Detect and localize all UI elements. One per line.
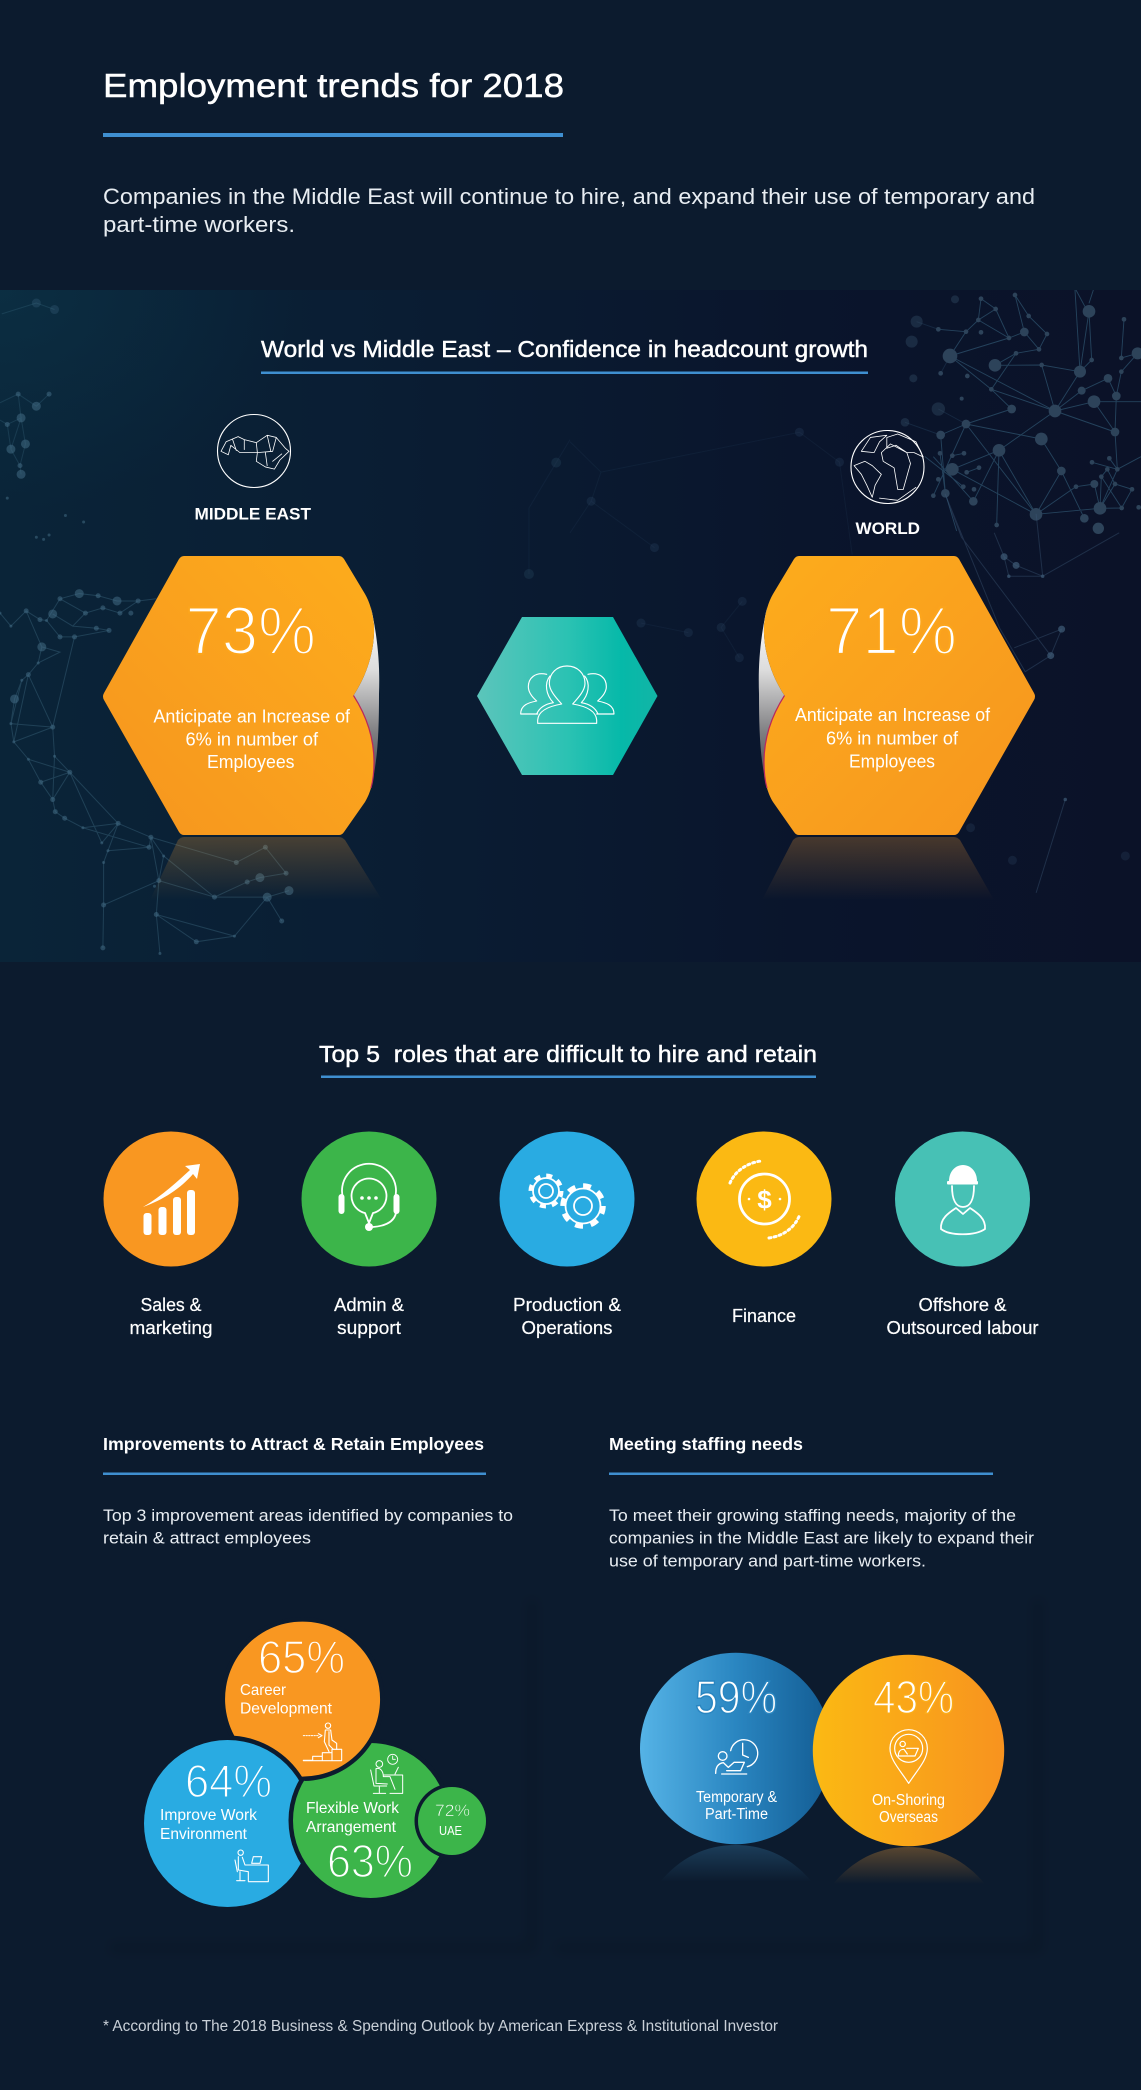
role: offshore and outsourced labour: Offshore & bbox=[918, 1295, 1006, 1315]
chart: improvement area bubbles bbox=[144, 1617, 490, 1907]
text block: meeting staffing needs: use of temporary and part-time workers. bbox=[609, 1552, 926, 1570]
chart: staffing need bubbles bbox=[640, 1653, 1004, 1884]
icon: central teal hexagon with people bbox=[477, 617, 658, 775]
reflection bbox=[762, 837, 994, 900]
role: admin and support: support bbox=[337, 1318, 401, 1338]
intro paragraph: Companies in the Middle East will continue to hire, and expand their use of temporary and bbox=[103, 184, 1035, 209]
bubble: improve work environment 64%: Environment bbox=[160, 1826, 248, 1843]
description: Anticipate an Increase of bbox=[795, 704, 991, 725]
bubble: on-shoring overseas 43%: 43% bbox=[873, 1671, 954, 1723]
title: Employment trends for 2018 bbox=[103, 67, 564, 104]
bubble: improve work environment 64%: Improve Work bbox=[160, 1807, 258, 1824]
upper right network map bbox=[901, 290, 1141, 534]
bubble: career development 65% bbox=[220, 1617, 384, 1781]
orange hexagon bbox=[103, 556, 374, 835]
faint centre nodes bbox=[529, 440, 570, 574]
icon: person with clock bbox=[716, 1740, 758, 1774]
bubble: on-shoring overseas 43%: On-Shoring bbox=[872, 1792, 945, 1809]
text block: meeting staffing needs: companies in the Middle East are likely to expand their bbox=[609, 1528, 1034, 1548]
role: finance bbox=[696, 1132, 832, 1326]
role: offshore and outsourced labour bbox=[886, 1132, 1038, 1338]
text block: improvements to attract and retain: retain & attract employees bbox=[103, 1528, 311, 1548]
role: finance: Finance bbox=[732, 1306, 796, 1326]
bubble: improve work environment 64% bbox=[144, 1740, 311, 1907]
callout: middle east 73% bbox=[103, 556, 382, 900]
bubble: career development 65%: Development bbox=[240, 1700, 333, 1718]
description: Anticipate an Increase of bbox=[154, 706, 351, 726]
icon: dollar coin bbox=[730, 1161, 800, 1238]
role: production and operations: Operations bbox=[522, 1318, 612, 1338]
bubble: flexible work arrangement 63%: Arrangement bbox=[306, 1819, 397, 1836]
label: world: WORLD bbox=[856, 519, 920, 538]
role: production and operations: Production & bbox=[513, 1295, 621, 1315]
bubble: UAE 72%: 72% bbox=[435, 1801, 470, 1820]
text block: improvements to attract and retain: Improvements to Attract & Retain Employees bbox=[103, 1434, 484, 1454]
bubble: temporary and part-time 59%: Part-Time bbox=[705, 1806, 768, 1823]
bubble: temporary and part-time 59%: Temporary & bbox=[696, 1789, 778, 1806]
role: sales and marketing: Sales & bbox=[140, 1295, 202, 1315]
heading: top 5 roles: Top 5 roles that are difficult to hire and retain bbox=[319, 1041, 817, 1067]
curled page fold bbox=[354, 607, 379, 788]
description: 6% in number of bbox=[826, 728, 959, 748]
role: offshore and outsourced labour: Outsourced labour bbox=[886, 1318, 1038, 1338]
bubble: flexible work arrangement 63% bbox=[288, 1738, 452, 1902]
role: admin and support: Admin & bbox=[334, 1295, 404, 1315]
bubble: temporary and part-time 59% bbox=[640, 1653, 831, 1844]
label: middle east: MIDDLE EAST bbox=[194, 504, 312, 524]
icon: career stairs bbox=[303, 1723, 342, 1761]
role: production and operations bbox=[500, 1132, 634, 1338]
bubble: career development 65%: 65% bbox=[258, 1631, 345, 1683]
description: Employees bbox=[849, 750, 935, 772]
intro paragraph: part-time workers. bbox=[103, 212, 295, 237]
text block: meeting staffing needs bbox=[609, 1434, 1034, 1570]
icon: dollar coin: $ bbox=[757, 1184, 772, 1214]
section heading: World vs Middle East – Confidence in headcount growth bbox=[261, 336, 868, 362]
intro paragraph bbox=[103, 184, 1035, 237]
icon: headset bbox=[338, 1164, 400, 1231]
text block: meeting staffing needs: To meet their growing staffing needs, majority of the bbox=[609, 1506, 1016, 1525]
text block: improvements to attract and retain bbox=[103, 1434, 513, 1548]
role: admin and support bbox=[302, 1132, 436, 1338]
role: sales and marketing: marketing bbox=[130, 1318, 212, 1338]
text block: meeting staffing needs: Meeting staffing needs bbox=[609, 1434, 803, 1454]
icon: location pin with person bbox=[890, 1730, 927, 1783]
description: 6% in number of bbox=[186, 728, 319, 750]
orange hexagon with curled page fold bbox=[759, 556, 1035, 835]
lower right network map bbox=[570, 432, 1125, 893]
description: Employees bbox=[207, 751, 294, 772]
bubble: career development 65%: Career bbox=[240, 1682, 287, 1699]
bubble: on-shoring overseas 43% bbox=[813, 1655, 1004, 1846]
bubble: UAE 72% bbox=[414, 1784, 490, 1858]
callout: world 71% bbox=[759, 556, 1035, 900]
reflection: on-shoring bbox=[833, 1847, 985, 1884]
text block: improvements to attract and retain: Top 3 improvement areas identified by companies to bbox=[103, 1506, 513, 1525]
reflection: temporary bbox=[660, 1845, 812, 1882]
role: sales and marketing bbox=[104, 1132, 238, 1338]
percentage: 73% bbox=[186, 593, 316, 669]
footnote: * According to The 2018 Business & Spending Outlook by American Express & Institutional Investor bbox=[103, 2018, 778, 2035]
icon: worker with hard hat bbox=[941, 1165, 985, 1234]
icon: world globe bbox=[851, 430, 924, 504]
icon: person at desk with clock bbox=[371, 1754, 403, 1793]
reflection bbox=[150, 837, 382, 900]
bubble: improve work environment 64%: 64% bbox=[185, 1755, 272, 1807]
panel shadows behind bubble charts bbox=[110, 1600, 1038, 1948]
bubble: flexible work arrangement 63%: 63% bbox=[327, 1835, 413, 1887]
description bbox=[795, 704, 991, 772]
bubble: on-shoring overseas 43%: Overseas bbox=[879, 1809, 938, 1826]
icon: person at laptop bbox=[235, 1850, 268, 1882]
description bbox=[154, 706, 351, 772]
panel: world vs middle east confidence bbox=[0, 290, 1141, 962]
percentage: 71% bbox=[826, 593, 957, 669]
icon: growth chart bbox=[143, 1164, 200, 1235]
icon: middle east globe bbox=[218, 414, 290, 488]
icon: gears bbox=[531, 1176, 603, 1226]
bubble: temporary and part-time 59%: 59% bbox=[695, 1671, 777, 1723]
bubble: UAE 72%: UAE bbox=[439, 1823, 462, 1838]
left network map bbox=[0, 303, 570, 954]
bubble: flexible work arrangement 63%: Flexible Work bbox=[306, 1800, 400, 1817]
